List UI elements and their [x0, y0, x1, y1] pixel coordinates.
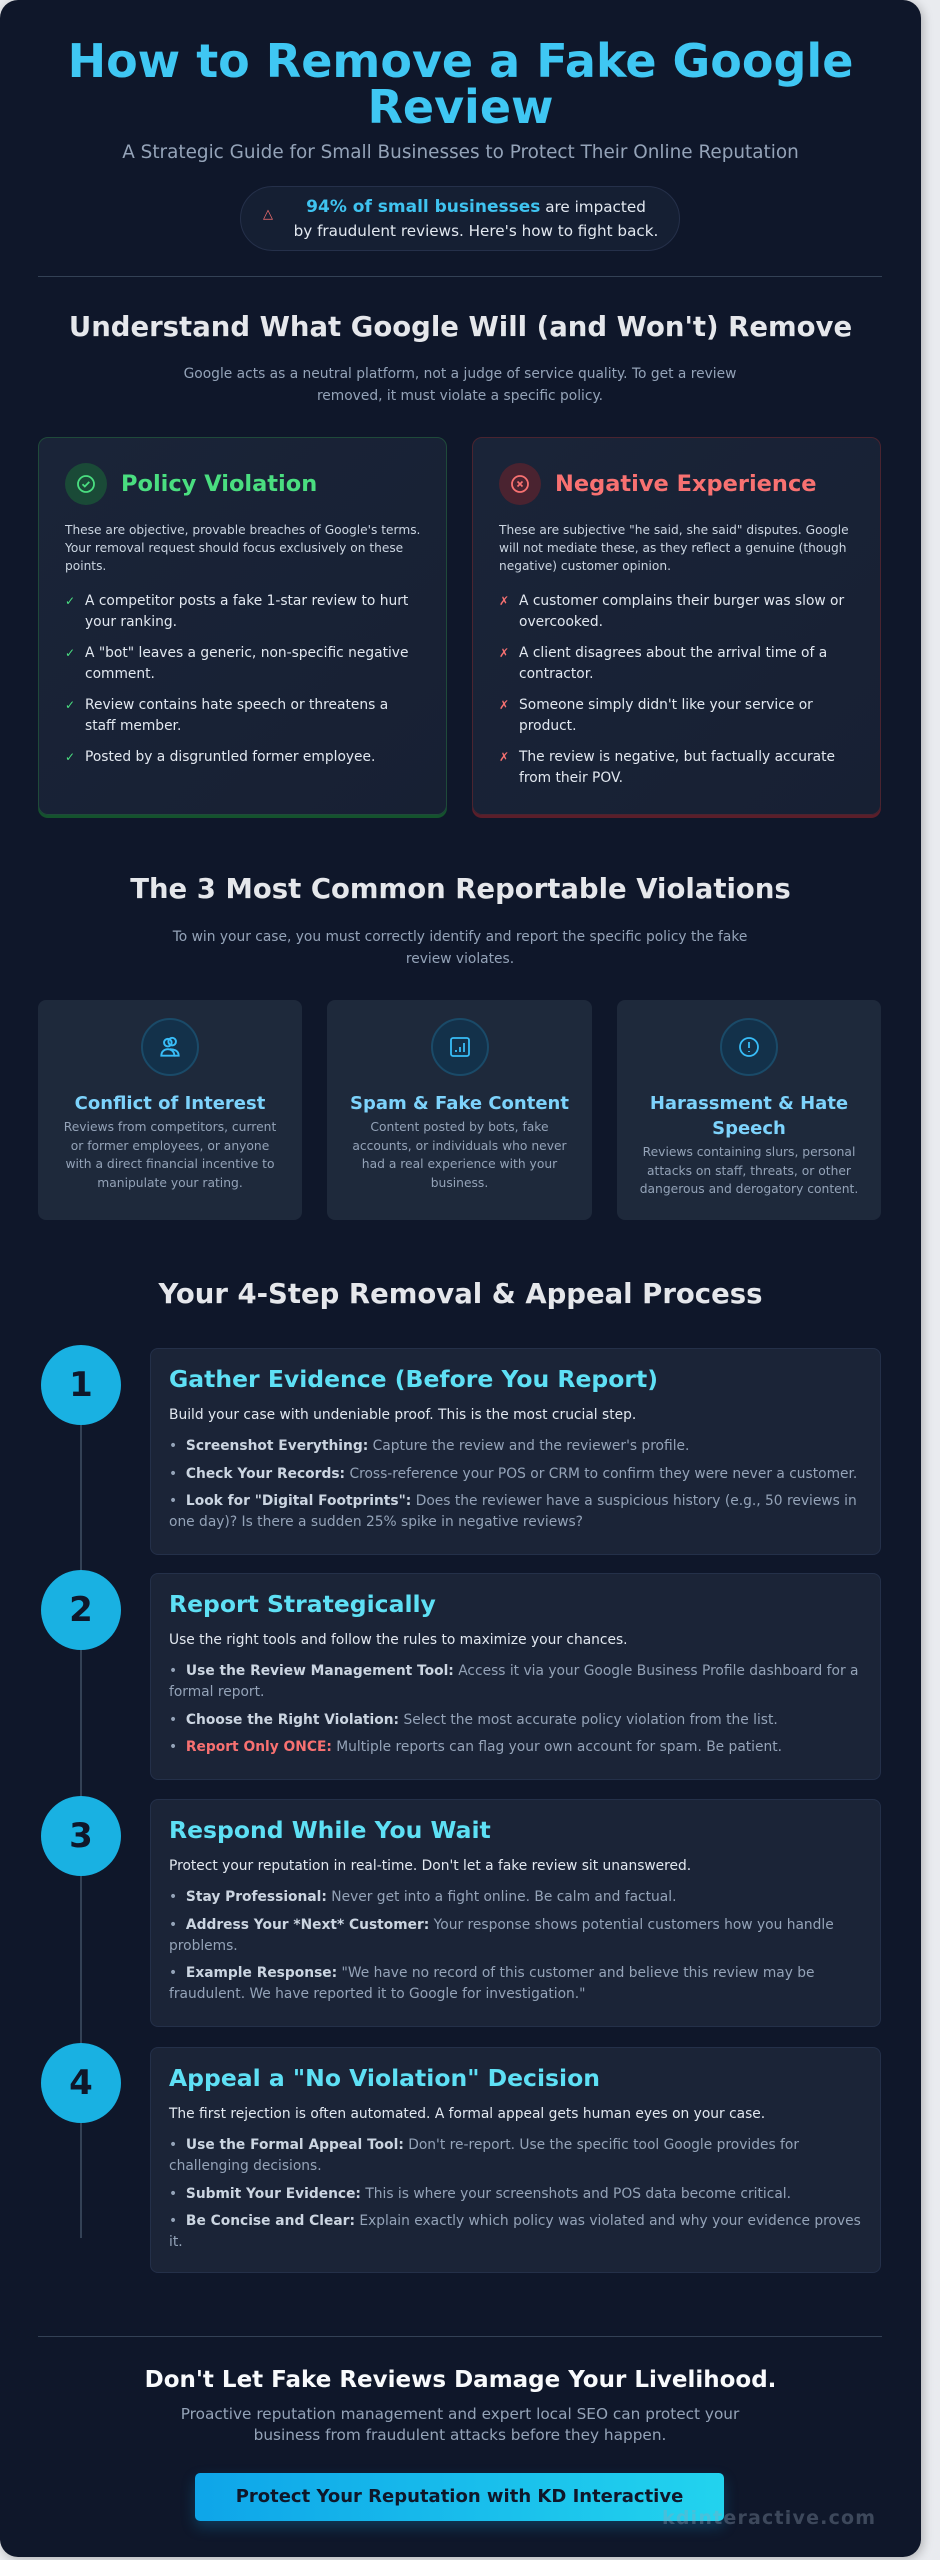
- title: [68, 34, 853, 134]
- step 2 card: • Report Only ONCE: Multiple reports can flag your own account for spam. Be patient.: [169, 1739, 782, 1755]
- title: How to Remove a Fake Google: [68, 34, 853, 88]
- list: non-violations: ✗: [499, 594, 509, 608]
- list: non-violations: [499, 593, 844, 786]
- panel: conflict of interest: [38, 1000, 302, 1220]
- step 4 card: The first rejection is often automated. A formal appeal gets human eyes on your case.: [169, 2106, 765, 2122]
- icon: alert: [720, 1018, 778, 1076]
- list: non-violations: ✗: [499, 646, 509, 660]
- stat text: by fraudulent reviews. Here's how to fight back.: [294, 222, 658, 240]
- panel: policy violation: [38, 437, 447, 815]
- step 3 card: • Address Your *Next* Customer: Your response shows potential customers how you handle problems.: [169, 1916, 834, 1954]
- list: violations: Review contains hate speech or threatens a staff member.: [85, 697, 388, 734]
- footer heading: Don't Let Fake Reviews Damage Your Livelihood.: [145, 2367, 776, 2393]
- step 3 card: [150, 1799, 881, 2027]
- list: violations: ✓: [65, 646, 75, 660]
- heading: 4-step process: Your 4-Step Removal & Appeal Process: [158, 1278, 762, 1310]
- list: violations: Posted by a disgruntled former employee.: [85, 749, 375, 765]
- heading: understand: Understand What Google Will (and Won't) Remove: [69, 311, 852, 343]
- stat text: 94% of small businesses are impacted: [306, 197, 646, 217]
- list: violations: ✓: [65, 750, 75, 764]
- CTA button: [195, 2473, 724, 2521]
- step 1 card: • Check Your Records: Cross-reference your POS or CRM to confirm they were never a customer.: [169, 1466, 857, 1482]
- list: violations: A "bot" leaves a generic, non-specific negative comment.: [85, 645, 408, 682]
- step 3 card: • Stay Professional: Never get into a fight online. Be calm and factual.: [169, 1889, 676, 1905]
- step 4 card: • Be Concise and Clear: Explain exactly which policy was violated and why your evidence proves it.: [169, 2213, 861, 2250]
- step 3 card: Protect your reputation in real-time. Don't let a fake review sit unanswered.: [169, 1858, 691, 1874]
- step 1 card: [150, 1348, 881, 1555]
- list: non-violations: Someone simply didn't like your service or product.: [519, 697, 813, 734]
- intro text: To win your case, you must correctly identify and report the specific policy the fake review violates.: [173, 929, 747, 967]
- heading: common violations: The 3 Most Common Reportable Violations: [130, 873, 791, 905]
- step 3 card: • Example Response: "We have no record of this customer and believe this review may be fraudulent. We have reported it to Google for investigation.": [169, 1965, 815, 2002]
- panel: harassment: [617, 1000, 881, 1220]
- step 4 card: Appeal a "No Violation" Decision: [169, 2064, 600, 2092]
- list: violations: [65, 593, 408, 765]
- description: These are subjective "he said, she said" disputes. Google will not mediate these, as they reflect a genuine (though negative) customer opinion.: [499, 523, 849, 573]
- panel: spam: Content posted by bots, fake accounts, or individuals who never had a real experience with your business.: [352, 1120, 567, 1190]
- panel: spam: Spam & Fake Content: [350, 1093, 569, 1114]
- step 4 card: [150, 2047, 881, 2273]
- step 2 card: Use the right tools and follow the rules to maximize your chances.: [169, 1632, 628, 1648]
- step 3 number: [41, 1796, 121, 1876]
- stat text: [294, 197, 658, 240]
- list: non-violations: ✗: [499, 698, 509, 712]
- step 1 card: Gather Evidence (Before You Report): [169, 1365, 658, 1393]
- panel: conflict of interest: Reviews from competitors, current or former employees, or anyone with a direct financial incentive to manipulate your rating.: [64, 1120, 276, 1190]
- step 4 number: 4: [69, 2063, 93, 2103]
- stat callout badge: [240, 186, 680, 251]
- intro text: Google acts as a neutral platform, not a judge of service quality. To get a review removed, it must violate a specific policy.: [184, 366, 736, 404]
- list: non-violations: A customer complains their burger was slow or overcooked.: [519, 593, 844, 630]
- list: violations: A competitor posts a fake 1-star review to hurt your ranking.: [85, 593, 408, 630]
- panel: spam: [327, 1000, 592, 1220]
- list: non-violations: A client disagrees about the arrival time of a contractor.: [519, 645, 827, 682]
- step 2 number: [41, 1570, 121, 1650]
- heading: policy violation: [65, 463, 317, 505]
- step 2 card: • Choose the Right Violation: Select the most accurate policy violation from the list.: [169, 1712, 778, 1728]
- step 3 card: Respond While You Wait: [169, 1816, 491, 1844]
- panel: harassment: Harassment & Hate Speech: [650, 1093, 848, 1139]
- watermark: kdinteractive.com: [662, 2507, 876, 2529]
- step 3 number: 3: [69, 1816, 93, 1856]
- icon: x circle: [499, 463, 541, 505]
- subtitle: A Strategic Guide for Small Businesses to Protect Their Online Reputation: [122, 142, 799, 163]
- step 4 card: • Use the Formal Appeal Tool: Don't re-report. Use the specific tool Google provides for challenging decisions.: [169, 2137, 799, 2174]
- icon: chart: [430, 1018, 488, 1076]
- list: non-violations: The review is negative, but factually accurate from their POV.: [519, 749, 835, 786]
- description: These are objective, provable breaches of Google's terms. Your removal request should focus exclusively on these points.: [65, 523, 420, 573]
- CTA button: Protect Your Reputation with KD Interactive: [236, 2486, 683, 2507]
- step 1 number: [41, 1345, 121, 1425]
- footer text: Proactive reputation management and expert local SEO can protect your business from fraudulent attacks before they happen.: [181, 2405, 739, 2444]
- step 2 number: 2: [69, 1590, 93, 1630]
- heading: negative experience: Negative Experience: [555, 471, 817, 497]
- heading: policy violation: Policy Violation: [121, 471, 317, 497]
- list: violations: ✓: [65, 698, 75, 712]
- title: Review: [367, 80, 554, 134]
- panel: conflict of interest: Conflict of Interest: [75, 1093, 265, 1114]
- panel: negative experience: [472, 437, 881, 815]
- step 4 number: [41, 2043, 121, 2123]
- step 1 card: • Screenshot Everything: Capture the review and the reviewer's profile.: [169, 1438, 689, 1454]
- step 1 card: Build your case with undeniable proof. This is the most crucial step.: [169, 1407, 636, 1423]
- step 2 card: [150, 1573, 881, 1780]
- step 1 number: 1: [69, 1365, 93, 1405]
- list: non-violations: ✗: [499, 750, 509, 764]
- panel: harassment: Reviews containing slurs, personal attacks on staff, threats, or other dangerous and derogatory content.: [640, 1145, 858, 1196]
- step 2 card: • Use the Review Management Tool: Access it via your Google Business Profile dashboard for a formal report.: [169, 1663, 858, 1700]
- list: violations: ✓: [65, 594, 75, 608]
- step 2 card: Report Strategically: [169, 1590, 436, 1618]
- heading: negative experience: [499, 463, 817, 505]
- step 1 card: • Look for "Digital Footprints": Does the reviewer have a suspicious history (e.g., 50 reviews in one day)? Is there a sudden 25% spike in negative reviews?: [169, 1493, 857, 1530]
- icon: warning: △: [263, 207, 273, 222]
- icon: check circle: [65, 463, 107, 505]
- icon: people: [141, 1018, 199, 1076]
- step 4 card: • Submit Your Evidence: This is where your screenshots and POS data become critical.: [169, 2186, 791, 2202]
